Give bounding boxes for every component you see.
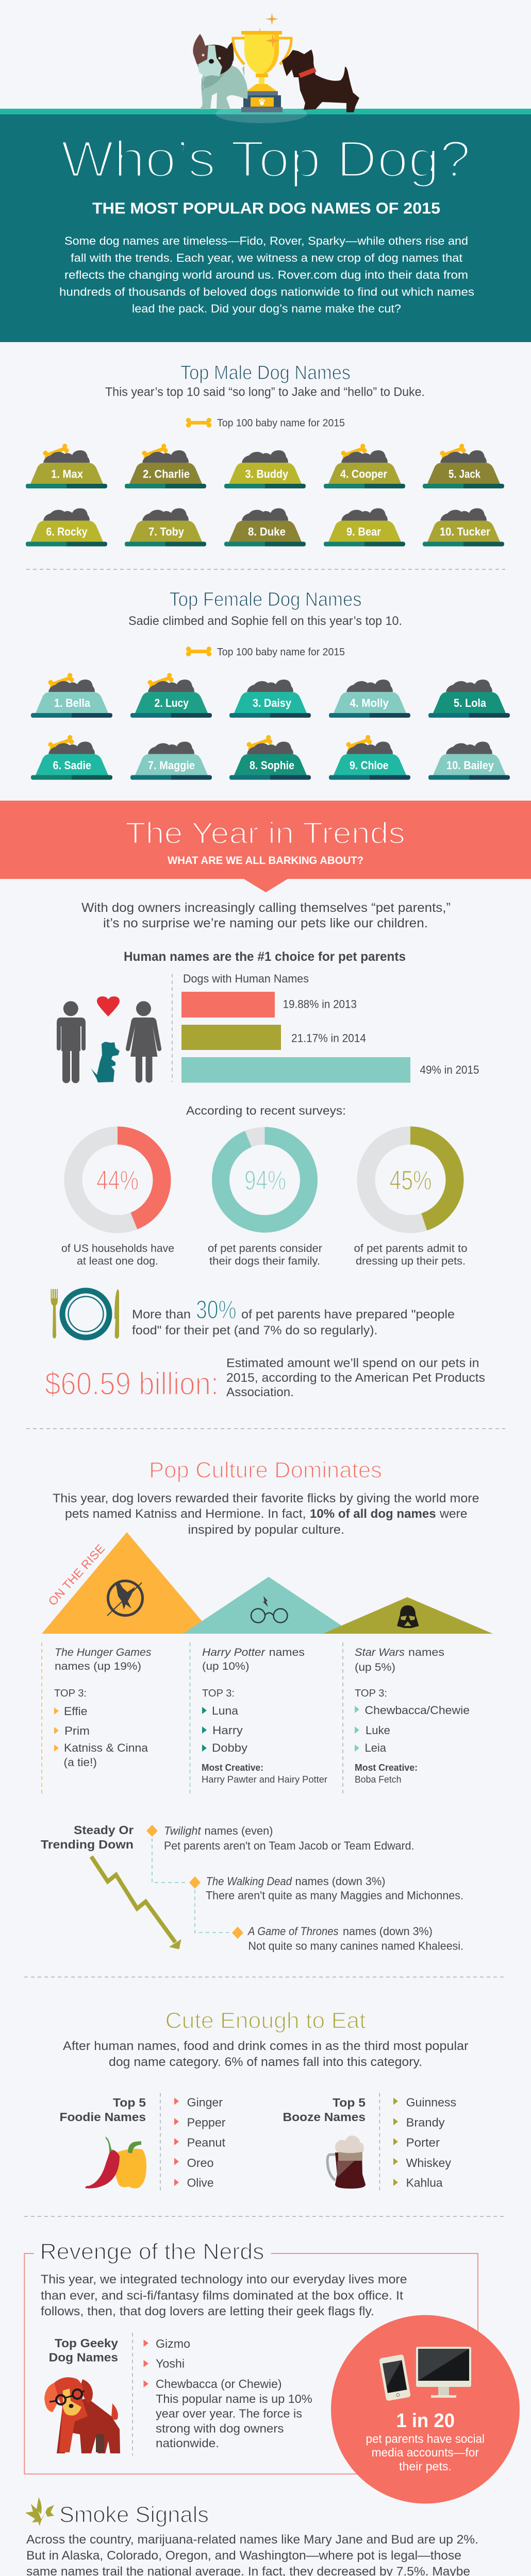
intro paragraph: lead the pack. Did your dog’s name make the cut? [132,302,401,315]
icon: leaf [25,2497,54,2526]
column: harry potter: Dobby [212,1741,247,1754]
donut chart: 45% [354,1136,467,1267]
subheading: top 5 foodie names: Foodie Names [60,2110,146,2124]
text: social media: media accounts—for [372,2446,479,2459]
heading: steady or trending down: Trending Down [41,1838,134,1851]
text: pop culture paragraph: This year, dog lovers rewarded their favorite flicks by giving the world more [53,1492,479,1505]
bowl: 4. Molly: 4. Molly [350,697,389,709]
column: harry potter: Most Creative: [202,1762,263,1773]
stat: 1 in 20: 1 in 20 [396,2410,455,2432]
spotlight ellipse under trophy [215,105,307,123]
subheading: top geeky dog names: Top Geeky [55,2336,118,2350]
text: pet parents intro [81,901,451,930]
text: pop culture paragraph [53,1492,479,1537]
bowl: 2. Lucy [130,672,212,718]
text: 60.59 billion stat: $60.59 billion: [45,1366,219,1402]
text: nerds paragraph [41,2273,407,2318]
column: hunger games: (a tie!) [64,1756,97,1769]
item: the walking dead: names (down 3%) [295,1875,386,1888]
bowl: 1. Max: 1. Max [51,468,84,480]
intro paragraph: hundreds of thousands of beloved dogs nationwide to find out which names [59,285,474,298]
column: star wars: Boba Fetch [355,1774,401,1785]
mountain: star wars [323,1597,493,1634]
icon: sitting dog [91,1042,120,1082]
text: social media: pet parents have social [366,2432,485,2445]
heading: revenge of the nerds: Revenge of the Nerds [40,2239,264,2264]
icon: heart [97,996,120,1016]
column: harry potter: Harry Pawter and Hairy Potter [202,1774,327,1785]
list: booze names [393,2096,456,2190]
heading: top female: Top Female Dog Names [169,589,362,611]
text: food paragraph: dog name category. 6% of names fall into this category. [109,2055,422,2069]
bowl: 3. Daisy [229,680,311,718]
column: harry potter: Harry [212,1724,243,1737]
bowl: 7. Toby: 7. Toby [148,526,185,538]
text: pop culture paragraph: 10% of all dog names [310,1507,436,1521]
panel: the year in trends banner [0,801,531,892]
heading: human names: Human names are the #1 choice for pet parents [124,950,406,964]
column: harry potter: Luna [212,1704,239,1717]
dark teal title panel [0,114,531,342]
bowl: 1. Bella: 1. Bella [54,697,91,709]
text: pop culture paragraph: inspired by popular culture. [188,1523,344,1537]
column: star wars: Leia [365,1741,387,1754]
column: harry potter [190,1642,327,1795]
icon: spotted bulldog [193,34,247,109]
arrow: downward zigzag [91,1857,181,1950]
item: twilight: Pet parents aren't on Team Jacob or Team Edward. [164,1839,414,1852]
panel: cute enough to eat [60,2008,468,2192]
bowl: 3. Daisy: 3. Daisy [253,697,292,709]
item: twilight [146,1824,414,1852]
icon: sparkles [257,13,278,36]
heading: pop culture: Pop Culture Dominates [149,1458,382,1483]
subheading: top geeky dog names [49,2336,118,2364]
text: smoke paragraph [26,2533,478,2576]
item: the walking dead: There aren't quite as many Maggies and Michonnes. [206,1889,463,1902]
column: hunger games: TOP 3: [54,1688,87,1699]
item: a game of thrones [232,1925,463,1953]
subheading: male: This year’s top 10 said “so long” to Jake and “hello” to Duke. [105,385,425,399]
text: food paragraph: After human names, food and drink comes in as the third most popular [63,2039,468,2053]
bowl: 6. Sadie: 6. Sadie [53,759,91,772]
bowl: 8. Sophie [229,734,311,780]
bowl: 9. Bear [324,508,405,546]
list: geeky names: year over year. The force is [156,2407,302,2420]
text: social media: their pets. [399,2460,452,2473]
legend: bone: Top 100 baby name for 2015 [217,417,345,429]
list: booze names: Brandy [406,2116,445,2129]
intro paragraph: fall with the trends. Each year, we witness a new crop of dog names that [71,251,462,264]
subheading: top geeky dog names: Dog Names [49,2350,118,2364]
bowl: 2. Charlie [125,443,206,488]
list: geeky names: nationwide. [156,2436,219,2450]
column: star wars: names [408,1647,444,1658]
donut chart: 44% [61,1136,174,1267]
text: 60.59 billion stat [45,1356,485,1402]
callout: 1 in 20 [331,2315,520,2504]
bowl: 1. Bella [31,672,112,718]
icon: chili and bell pepper [85,2137,146,2189]
heading: top male: Top Male Dog Names [180,362,351,384]
column: star wars: TOP 3: [355,1688,387,1699]
subheading: top 5 foodie names: Top 5 [113,2096,146,2109]
text: pop culture paragraph: pets named Katniss and Hermione. In fact, [65,1507,306,1521]
list: geeky names: strong with dog owners [156,2421,284,2435]
item: the walking dead [189,1875,463,1902]
panel: revenge of the nerds [24,2239,520,2504]
subheading: top 5 foodie names [60,2096,146,2124]
subheading: female: Sadie climbed and Sophie fell on this year’s top 10. [128,614,402,628]
item: the walking dead: The Walking Dead [206,1875,292,1888]
bowl: 5. Lola [428,680,510,718]
bowl: 5. Jack [423,443,504,488]
subheading: barking: WHAT ARE WE ALL BARKING ABOUT? [168,854,363,867]
item: a game of thrones: names (down 3%) [343,1925,433,1938]
panel: top female dog names [31,589,510,780]
heading: recent surveys: According to recent surveys: [186,1104,346,1117]
heading: the year in trends: The Year in Trends [125,817,405,850]
list: geeky names [143,2337,312,2450]
heading: steady or trending down [41,1823,134,1851]
icon: gold trophy [233,31,291,112]
bowl: 4. Molly [329,680,410,718]
icon: woman [126,1001,161,1083]
teal ground stripe [0,109,531,114]
coral banner [0,801,531,892]
bar: 2013 [181,992,357,1018]
bowl: 7. Maggie: 7. Maggie [148,759,195,772]
list: geeky names: Chewbacca (or Chewie) [156,2377,281,2391]
text: nerds paragraph: follows, then, that dog lovers are letting their geek flags fly. [41,2304,374,2318]
column: hunger games: Katniss & Cinna [64,1741,148,1754]
text: people food stat: More than [132,1308,191,1321]
chart: popularity mountains [42,1532,493,1634]
column: hunger games: names (up 19%) [55,1660,141,1672]
column: hunger games: Prim [64,1724,90,1737]
donut chart: 44%: 44% [96,1165,139,1196]
panel: surveys [61,1104,467,1267]
text: pet parents intro: With dog owners increasingly calling themselves “pet parents,” [81,901,451,915]
bar: 2014: 21.17% in 2014 [291,1031,366,1045]
item: a game of thrones: Not quite so many canines named Khaleesi. [248,1939,463,1953]
text: 60.59 billion stat: Association. [226,1385,294,1399]
column: star wars [343,1642,470,1795]
text: nerds paragraph: This year, we integrated technology into our everyday lives more [41,2273,407,2286]
column: star wars: Most Creative: [355,1762,418,1773]
donut chart: 94% [208,1136,322,1267]
text: people food stat: food" for their pet (and 7% do so regularly). [132,1324,377,1337]
column: harry potter: Harry Potter [202,1647,266,1658]
donut chart: 44%: at least one dog. [77,1255,158,1267]
icon: plate with fork and knife [51,1288,119,1341]
bar: 2015 [181,1057,479,1083]
column: hunger games: Effie [64,1705,88,1718]
donut chart: 45%: 45% [390,1165,432,1196]
bowl: 3. Buddy: 3. Buddy [245,468,289,480]
icon: man [57,1001,86,1083]
chart title: Dogs with Human Names [183,972,309,985]
bowl: 10. Tucker: 10. Tucker [440,526,490,538]
bowl: 7. Maggie [130,742,212,780]
heading: steady or trending down: Steady Or [74,1823,134,1837]
bowl: 9. Chloe [329,734,410,780]
bowl: 9. Bear: 9. Bear [346,526,381,538]
intro paragraph: reflects the changing world around us. Rover.com dug into their data from [64,268,468,281]
bowl: 10. Bailey [428,742,510,780]
donut chart: 44%: of US households have [61,1243,174,1255]
column: star wars: (up 5%) [355,1662,395,1673]
list: foodie names: Olive [187,2176,213,2190]
donut chart: 94%: their dogs their family. [209,1255,320,1267]
bowl: 2. Lucy: 2. Lucy [155,697,189,709]
icon: family with dog [57,996,161,1083]
bowl: 6. Sadie [31,734,112,780]
text: people food stat: 30% [196,1295,236,1324]
icon: black scottie dog [282,49,359,112]
bowl: 9. Chloe: 9. Chloe [350,759,389,772]
column: star wars: Star Wars [355,1647,405,1658]
bowl: 10. Tucker [423,508,504,546]
list: foodie names [174,2096,226,2190]
heading: smoke signals: Smoke Signals [59,2502,209,2528]
list: booze names: Kahlua [406,2176,443,2190]
text: people food stat: of pet parents have prepared "people [241,1308,455,1321]
list: geeky names: Yoshi [156,2357,185,2370]
icon: smartphone [379,2354,411,2401]
list: geeky names: Gizmo [156,2337,190,2350]
item: twilight: Twilight [164,1824,201,1837]
mountain: harry potter [183,1577,354,1634]
panel: hero header [0,13,531,342]
text: pet parents intro: it’s no surprise we’re naming our pets like our children. [103,916,428,930]
list: foodie names: Oreo [187,2156,213,2170]
list: foodie names: Pepper [187,2116,226,2129]
bar: 2013: 19.88% in 2013 [283,997,357,1011]
donut chart: 94%: of pet parents consider [208,1243,322,1255]
bowl: 6. Rocky [26,508,107,546]
text: social media [366,2432,485,2473]
text: smoke paragraph: Across the country, marijuana-related names like Mary Jane and Bud are up 2%. [26,2533,478,2547]
column: harry potter: TOP 3: [202,1688,235,1699]
subheading: top 5 booze names: Booze Names [283,2110,366,2124]
bowl: 1. Max [26,443,107,488]
text: food paragraph [63,2039,468,2069]
list: booze names: Porter [406,2136,440,2149]
text: smoke paragraph: But in Alaska, Colorado, Oregon, and Washington—where pot is legal—those [26,2549,461,2563]
subheading: top 5 booze names [283,2096,366,2124]
bar: 2015: 49% in 2015 [420,1063,479,1076]
subtitle: THE MOST POPULAR DOG NAMES OF 2015 [92,199,440,217]
bowl: 5. Jack: 5. Jack [449,468,481,480]
column: hunger games [42,1642,152,1795]
bowl: 7. Toby [125,508,206,546]
panel: smoke signals [25,2497,496,2576]
panel: pop culture dominates [42,1458,493,1795]
panel: top male dog names [26,362,504,546]
text: 60.59 billion stat: 2015, according to the American Pet Products [226,1371,485,1385]
item: twilight: names (even) [204,1824,273,1837]
text: people food stat [132,1295,455,1337]
bowl: 10. Bailey: 10. Bailey [446,759,494,772]
list: booze names: Guinness [406,2096,456,2109]
intro paragraph [59,234,474,315]
bar chart: dogs with human names [181,972,479,1083]
mountain: hunger games [42,1532,212,1634]
legend: bone: Top 100 baby name for 2015 [217,647,345,658]
text: nerds paragraph: than ever, and sci-fi/fantasy films dominated at the box office. It [41,2289,403,2303]
bowl: 5. Lola: 5. Lola [454,697,487,709]
list: booze names: Whiskey [406,2156,451,2170]
column: star wars: Luke [366,1724,390,1737]
donut chart: 45%: of pet parents admit to [354,1243,467,1255]
bar: 2014 [181,1025,366,1050]
panel: steady or trending down [41,1823,463,1953]
label: on the rise: ON THE RISE [45,1541,107,1608]
item: a game of thrones: A Game of Thrones [247,1925,339,1938]
bowl: 3. Buddy [224,450,306,488]
icon: desktop monitor [416,2347,471,2398]
border: revenge box [24,2253,478,2474]
bowl: 6. Rocky: 6. Rocky [46,526,88,538]
column: harry potter: (up 10%) [202,1660,250,1672]
bowl: 8. Duke: 8. Duke [248,526,286,538]
bowl: 4. Cooper [324,443,405,488]
column: hunger games: The Hunger Games [55,1647,152,1658]
list: geeky names: This popular name is up 10% [156,2392,312,2405]
bowl: 8. Sophie: 8. Sophie [250,759,294,772]
heading: cute enough to eat: Cute Enough to Eat [165,2008,366,2033]
icon: beer mug [327,2136,366,2189]
bowl: 2. Charlie: 2. Charlie [143,468,190,480]
subheading: top 5 booze names: Top 5 [333,2096,366,2109]
title: Who’s Top Dog? [61,130,471,188]
donut chart: 94%: 94% [244,1165,286,1196]
list: foodie names: Ginger [187,2096,223,2109]
list: foodie names: Peanut [187,2136,226,2149]
text: 60.59 billion stat: Estimated amount we’ll spend on our pets in [226,1356,479,1370]
column: harry potter: names [269,1647,305,1658]
icon: geek dog with glasses [44,2377,120,2453]
donut chart: 45%: dressing up their pets. [356,1255,466,1267]
bowl: 8. Duke [224,508,306,546]
column: star wars: Chewbacca/Chewie [365,1704,470,1717]
intro paragraph: Some dog names are timeless—Fido, Rover, Sparky—while others rise and [64,234,468,247]
text: pop culture paragraph: were [439,1507,467,1521]
bowl: 4. Cooper: 4. Cooper [340,468,387,480]
